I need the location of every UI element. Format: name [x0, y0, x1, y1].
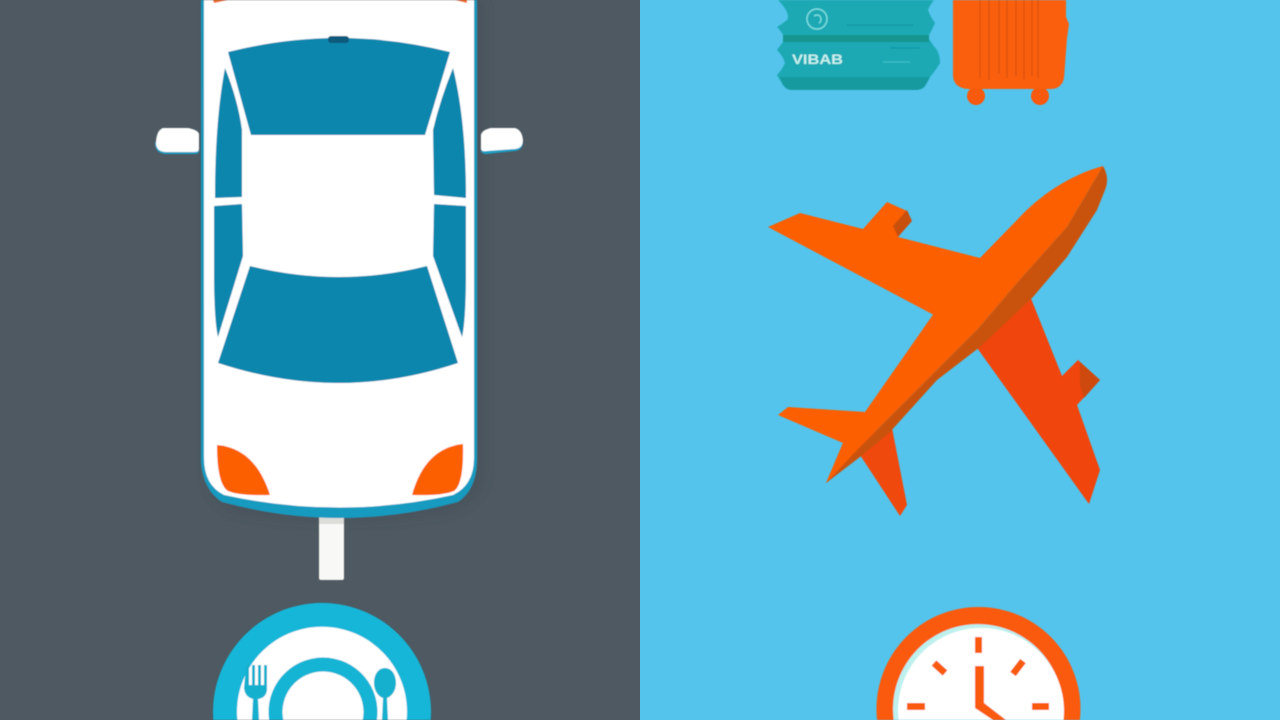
spoon: [374, 668, 396, 720]
near tail: [778, 407, 880, 483]
rear window: [218, 266, 458, 383]
wheel right: [1031, 87, 1049, 105]
fuselage upper: [826, 166, 1103, 483]
icon: orange suitcase: [953, 0, 1069, 105]
top right lamp fragment: [455, 0, 467, 3]
far engine shade: [1080, 362, 1100, 398]
plate ring: [268, 657, 378, 720]
right front side window: [433, 68, 466, 198]
suitcase body: [953, 0, 1069, 89]
left front side window: [215, 68, 242, 198]
car body: [201, 0, 477, 518]
wallet dark band: [783, 35, 929, 42]
fork: [244, 665, 267, 720]
mirror sensor: [328, 36, 349, 43]
windshield: [228, 38, 450, 135]
wallet light line: [883, 61, 910, 63]
suitcase ribs: [980, 0, 1038, 80]
car body highlight: [204, 0, 474, 508]
right lamp: [412, 444, 463, 495]
car rear bar: [319, 516, 344, 580]
wallet lower band: [780, 77, 930, 90]
clock hands: [975, 666, 1006, 720]
fuselage lower shade: [826, 166, 1107, 483]
left lamp: [217, 445, 270, 495]
clock face shading: [893, 624, 1063, 720]
clock ticks: [907, 637, 1049, 706]
icon: clock: [876, 607, 1080, 720]
panel: sky side: [640, 0, 1280, 720]
near wing and engine: [768, 202, 1010, 340]
wallet fine lines: [847, 25, 920, 48]
far tail: [860, 428, 907, 516]
wallet emblem: [807, 9, 827, 29]
icon: plate and cutlery: [213, 603, 431, 720]
clock face: [898, 628, 1064, 720]
plate white: [237, 627, 407, 720]
near engine shade: [893, 210, 912, 237]
left mirror: [155, 128, 199, 154]
far wing: [975, 296, 1100, 504]
panel: road side: [0, 0, 640, 720]
top left lamp fragment: [213, 0, 228, 3]
icon: airplane: [768, 166, 1107, 516]
wallet label: VIBAB: [792, 51, 843, 67]
icon: teal passport wallet: [777, 0, 940, 90]
right rear side window: [433, 204, 466, 337]
right mirror: [481, 128, 523, 154]
icon: car top view: [155, 0, 523, 580]
left rear side window: [214, 204, 243, 337]
